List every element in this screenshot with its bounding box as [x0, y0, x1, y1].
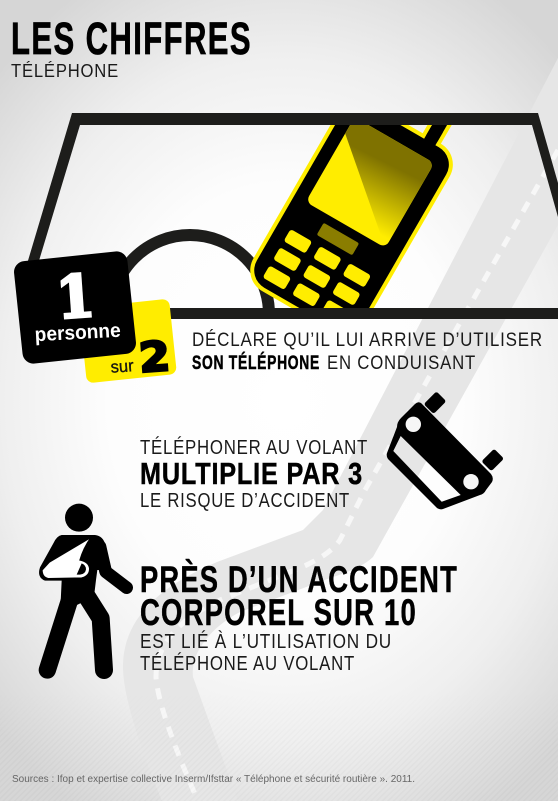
black badge: 1 personne: personne	[34, 320, 121, 346]
icon: mobile phone	[250, 125, 453, 308]
road background	[123, 58, 558, 801]
text block: multiplie par 3: TÉLÉPHONER AU VOLANT	[140, 436, 368, 459]
driver head outline	[111, 235, 269, 314]
subtitle: TÉLÉPHONE	[11, 60, 119, 81]
text block: multiplie par 3: MULTIPLIE PAR 3	[140, 457, 363, 491]
icon: overturned car	[387, 391, 504, 509]
text block: accident corporel	[140, 559, 458, 675]
windscreen frame	[27, 113, 558, 319]
black badge: 1 personne: 1	[54, 262, 97, 332]
text block: déclare: EN CONDUISANT	[327, 353, 476, 374]
yellow badge: sur 2	[79, 299, 177, 383]
sources footnote: Sources : Ifop et expertise collective Inserm/Ifsttar « Téléphone et sécurité routière ». 2011.	[12, 774, 415, 785]
title: LES CHIFFRES	[11, 13, 252, 64]
icon: injured person with sling	[39, 504, 127, 670]
text block: multiplie par 3	[140, 436, 368, 512]
text block: accident corporel: CORPOREL SUR 10	[140, 592, 417, 633]
yellow badge: sur 2: sur	[110, 356, 135, 377]
yellow badge: sur 2: 2	[137, 332, 172, 382]
text block: déclare: SON TÉLÉPHONE	[192, 352, 320, 374]
text block: accident corporel: EST LIÉ À L’UTILISATION DU	[140, 630, 392, 653]
text block: accident corporel: PRÈS D’UN ACCIDENT	[140, 559, 458, 600]
text block: déclare	[192, 330, 543, 374]
text block: multiplie par 3: LE RISQUE D’ACCIDENT	[140, 490, 350, 512]
black badge: 1 personne	[13, 250, 137, 365]
text block: accident corporel: TÉLÉPHONE AU VOLANT	[140, 652, 355, 675]
